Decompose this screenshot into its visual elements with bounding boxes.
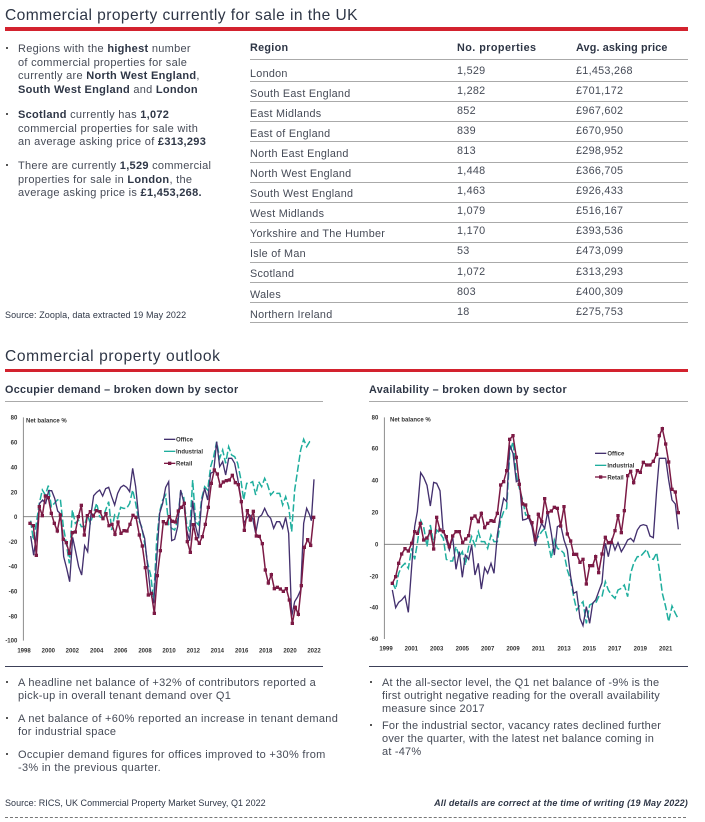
table: regions: East Midlands: [250, 108, 321, 120]
chart: occupier demand: 2010: [162, 648, 176, 654]
chart: occupier demand: 1998: [17, 648, 31, 654]
bullet: offices: [6, 749, 326, 774]
chart: occupier demand: 2006: [114, 648, 128, 654]
chart: occupier demand: 2004: [90, 648, 104, 654]
table: regions: 813: [457, 145, 476, 157]
legend: availability: [595, 452, 635, 481]
key points: availability: [370, 677, 661, 758]
chart: occupier demand: [5, 415, 321, 654]
chart: availability: [370, 415, 681, 653]
table: regions: 803: [457, 286, 476, 298]
chart: occupier demand: 2002: [66, 648, 80, 654]
table: regions: 1,079: [457, 205, 485, 217]
table: regions: 1,529: [457, 65, 485, 77]
chart: occupier demand: 2022: [307, 648, 321, 654]
table: regions: [250, 42, 668, 321]
table: regions: 1,072: [457, 266, 485, 278]
chart: availability: -20: [370, 574, 379, 580]
bullet: tenant demand: pick-up in overall tenant demand over Q1: [18, 690, 231, 702]
table: regions: 839: [457, 125, 476, 137]
bullet: industrial vacancy: [370, 720, 661, 758]
table: regions: Avg. asking price: [576, 42, 668, 54]
chart: occupier demand: 2008: [138, 648, 152, 654]
chart: availability: 60: [372, 446, 379, 452]
heading: currently for sale: Commercial property currently for sale in the UK: [5, 7, 358, 24]
bullet: Scotland: an average asking price of £313,293: [18, 136, 206, 148]
legend: availability: Office: [607, 452, 625, 458]
bullet: industrial: [6, 713, 338, 738]
bullet: industrial vacancy: at -47%: [382, 746, 421, 758]
table: regions: £1,453,268: [576, 65, 633, 77]
chart: occupier demand: -40: [9, 565, 18, 571]
bullet: London: There are currently 1,529 commercial: [18, 160, 211, 172]
table: regions: £967,602: [576, 105, 623, 117]
chart: occupier demand: -60: [9, 590, 18, 596]
table: regions: Isle of Man: [250, 248, 306, 260]
table: regions: £298,952: [576, 145, 623, 157]
table: regions: North West England: [250, 168, 351, 180]
chart: availability: 2001: [405, 647, 419, 653]
table: regions: 1,170: [457, 225, 485, 237]
table: regions: North East England: [250, 148, 349, 160]
chart: availability: 2017: [608, 647, 622, 653]
table: regions: Region: [250, 42, 288, 54]
table: regions: London: [250, 68, 288, 80]
table: regions: 1,448: [457, 165, 485, 177]
bullet: London: [6, 160, 211, 199]
bullet: London: average asking price is £1,453,268.: [18, 187, 202, 199]
bullet: highest regions: [6, 43, 200, 96]
table: regions: South West England: [250, 188, 353, 200]
table: regions: 1,282: [457, 85, 485, 97]
bullet: offices: Occupier demand figures for offices improved to +30% from: [18, 749, 326, 761]
bullet: Scotland: commercial properties for sale with: [18, 123, 198, 135]
source: Zoopla: Source: Zoopla, data extracted 19 May 2022: [5, 310, 186, 320]
bullet: highest regions: South West England and London: [18, 84, 198, 96]
table: regions: Scotland: [250, 268, 294, 280]
chart: availability: 2019: [634, 647, 648, 653]
table: regions: 852: [457, 105, 476, 117]
bullet: industrial: for industrial space: [18, 726, 116, 738]
table: regions: £400,309: [576, 286, 623, 298]
chart: occupier demand: 40: [11, 465, 18, 471]
chart: availability: 2013: [557, 647, 571, 653]
table: regions: £313,293: [576, 266, 623, 278]
table: regions: Yorkshire and The Humber: [250, 228, 385, 240]
chart: occupier demand: 2014: [211, 648, 225, 654]
table: regions: £701,172: [576, 85, 623, 97]
chart: availability: 80: [372, 415, 379, 421]
table: regions: £393,536: [576, 225, 623, 237]
chart: occupier demand: 0: [14, 515, 18, 521]
bullet: all-sector: measure since 2017: [382, 703, 485, 715]
table: regions: £473,099: [576, 245, 623, 257]
legend: availability: Retail: [607, 475, 624, 481]
chart: availability: 2011: [532, 647, 545, 653]
bullet: all-sector: first outright negative reading for the overall availability: [382, 690, 660, 702]
chart: availability: 2007: [481, 647, 495, 653]
key points: for sale: [6, 43, 211, 199]
chart: occupier demand: -80: [9, 614, 18, 620]
legend: occupier demand: Industrial: [176, 450, 203, 456]
bullet: highest regions: of commercial properties for sale: [18, 57, 187, 69]
subheading: occupier demand: Occupier demand – broken down by sector: [5, 384, 238, 396]
bullet: offices: -3% in the previous quarter.: [18, 762, 161, 774]
bullet: tenant demand: A headline net balance of +32% of contributors reported a: [18, 677, 316, 689]
chart: availability: Net balance %: [390, 418, 431, 424]
chart: availability: 1999: [379, 647, 393, 653]
chart: availability: -40: [370, 605, 379, 611]
chart: availability: 40: [372, 478, 379, 484]
chart: availability: 0: [375, 542, 379, 548]
table: regions: South East England: [250, 88, 350, 100]
bullet: tenant demand: [6, 677, 316, 702]
table: regions: £670,950: [576, 125, 623, 137]
chart: occupier demand: 80: [11, 415, 18, 421]
table: regions: 18: [457, 306, 470, 318]
bullet: highest regions: Regions with the highest number: [18, 43, 191, 55]
chart: occupier demand: -20: [9, 540, 18, 546]
disclaimer: All details are correct at the time of writing (19 May 2022): [434, 798, 688, 808]
chart: availability: 2021: [659, 647, 673, 653]
table: regions: 1,463: [457, 185, 485, 197]
chart: availability: 2003: [430, 647, 444, 653]
table: regions: East of England: [250, 128, 330, 140]
table: regions: £516,167: [576, 205, 623, 217]
legend: occupier demand: Office: [176, 438, 194, 444]
chart: occupier demand: 2020: [283, 648, 297, 654]
heading: outlook: Commercial property outlook: [5, 348, 221, 365]
table: regions: Northern Ireland: [250, 309, 332, 321]
chart: availability: 2005: [456, 647, 470, 653]
bullet: highest regions: currently are North West England,: [18, 70, 200, 82]
chart: occupier demand: Net balance %: [26, 418, 67, 424]
bullet: Scotland: Scotland currently has 1,072: [18, 109, 169, 121]
chart: availability: -60: [370, 637, 379, 643]
table: regions: Wales: [250, 289, 281, 301]
bullet: London: properties for sale in London, the: [18, 174, 192, 186]
subheading: availability: Availability – broken down by sector: [369, 384, 567, 396]
table: regions: £926,433: [576, 185, 623, 197]
table: regions: £275,753: [576, 306, 623, 318]
table: regions: 53: [457, 245, 470, 257]
legend: availability: Industrial: [607, 464, 635, 470]
legend: occupier demand: [164, 438, 203, 468]
bullet: industrial vacancy: For the industrial sector, vacancy rates declined further: [382, 720, 661, 732]
chart: availability: 2009: [506, 647, 520, 653]
source: RICS: Source: RICS, UK Commercial Property Market Survey, Q1 2022: [5, 798, 266, 808]
chart: occupier demand: 2018: [259, 648, 273, 654]
bullet: Scotland: [6, 109, 206, 148]
legend: occupier demand: Retail: [176, 462, 193, 468]
table: regions: West Midlands: [250, 208, 324, 220]
bullet: industrial: A net balance of +60% reported an increase in tenant demand: [18, 713, 338, 725]
chart: occupier demand: -100: [5, 639, 18, 645]
table: regions: No. properties: [457, 42, 536, 54]
chart: availability: 2015: [583, 647, 597, 653]
chart: availability: 20: [372, 510, 379, 516]
bullet: industrial vacancy: over the quarter, with the latest net balance coming in: [382, 733, 654, 745]
chart: occupier demand: 60: [11, 441, 18, 447]
chart: occupier demand: 2012: [187, 648, 201, 654]
table: regions: £366,705: [576, 165, 623, 177]
chart: occupier demand: 2016: [235, 648, 249, 654]
chart: occupier demand: 2000: [42, 648, 56, 654]
chart: occupier demand: 20: [11, 490, 18, 496]
bullet: all-sector: [370, 677, 660, 715]
key points: occupier demand: [6, 677, 338, 774]
bullet: all-sector: At the all-sector level, the Q1 net balance of -9% is the: [382, 677, 659, 689]
